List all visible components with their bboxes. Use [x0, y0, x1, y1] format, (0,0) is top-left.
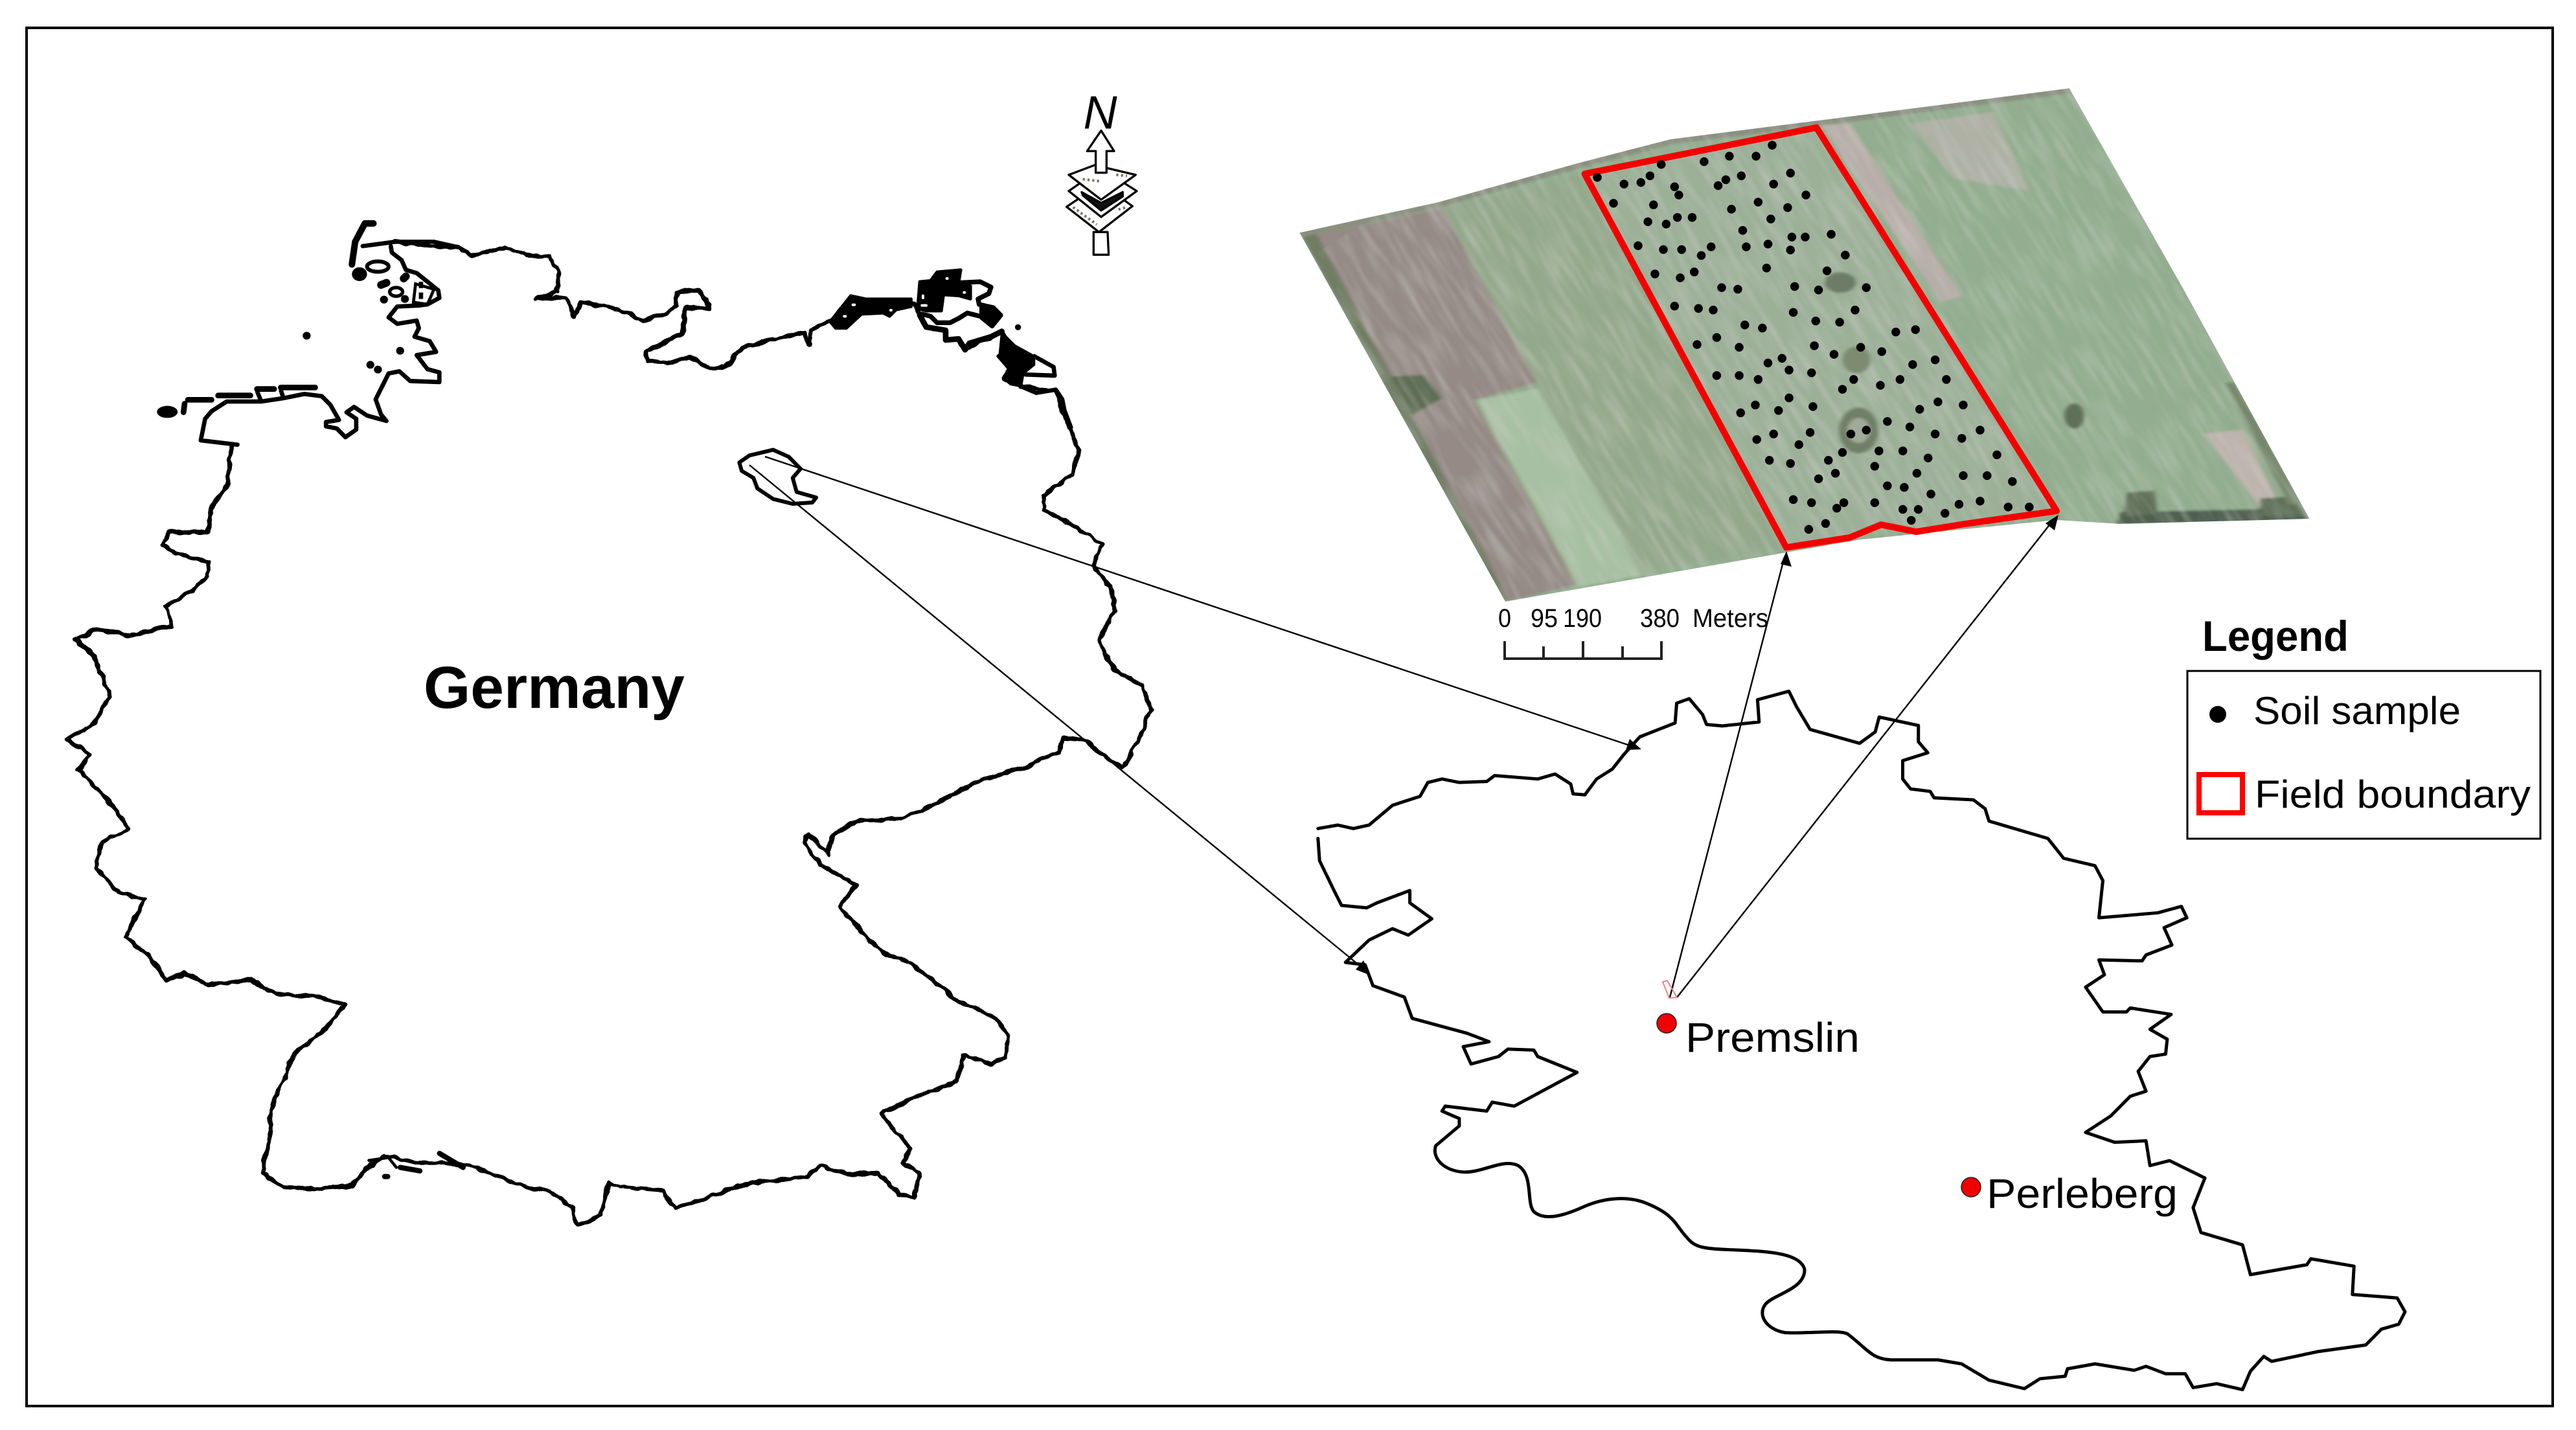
scale bar: 95 — [1531, 604, 1558, 633]
region: Prignitz small outline — [739, 450, 816, 504]
points: soil sample dots — [1597, 145, 2029, 529]
marker: Premslin: Premslin — [1685, 1014, 1860, 1061]
icon: north arrow: N — [1084, 87, 1118, 139]
scale bar — [1498, 604, 1768, 659]
texture: crop streaks — [1323, 89, 2309, 601]
arrow: field location to field, right — [1677, 515, 2058, 997]
legend: Field boundary — [2255, 773, 2531, 816]
scale bar: 190 — [1563, 604, 1602, 633]
map: Prignitz district enlarged outline — [1318, 691, 2405, 1390]
scale bar: 0 — [1498, 604, 1511, 633]
arrow: Germany region to district, upper — [765, 457, 1641, 750]
legend: Legend — [2202, 612, 2349, 660]
legend — [2187, 612, 2540, 839]
marker: Perleberg: Perleberg — [1987, 1170, 2178, 1217]
scale bar: 380 — [1640, 604, 1680, 633]
label: Germany: Germany — [424, 655, 685, 721]
boundary: study field in red — [1585, 128, 2057, 547]
scale bar: Meters — [1693, 604, 1768, 633]
sub-outline: Baltic islands Darss, Ruegen and Usedom — [830, 270, 1071, 427]
icon: north arrow — [1067, 87, 1137, 255]
legend: Soil sample — [2253, 689, 2461, 732]
sub-outline: North Frisian coast and Wadden Sea islands — [157, 223, 458, 445]
marker: tiny field location — [1663, 981, 1677, 998]
arrow: Germany region to district, lower — [749, 465, 1371, 975]
panel: satellite image of field — [1299, 88, 2310, 602]
arrow: field location to field, left — [1670, 551, 1792, 997]
map: Germany outline — [67, 223, 1152, 1226]
